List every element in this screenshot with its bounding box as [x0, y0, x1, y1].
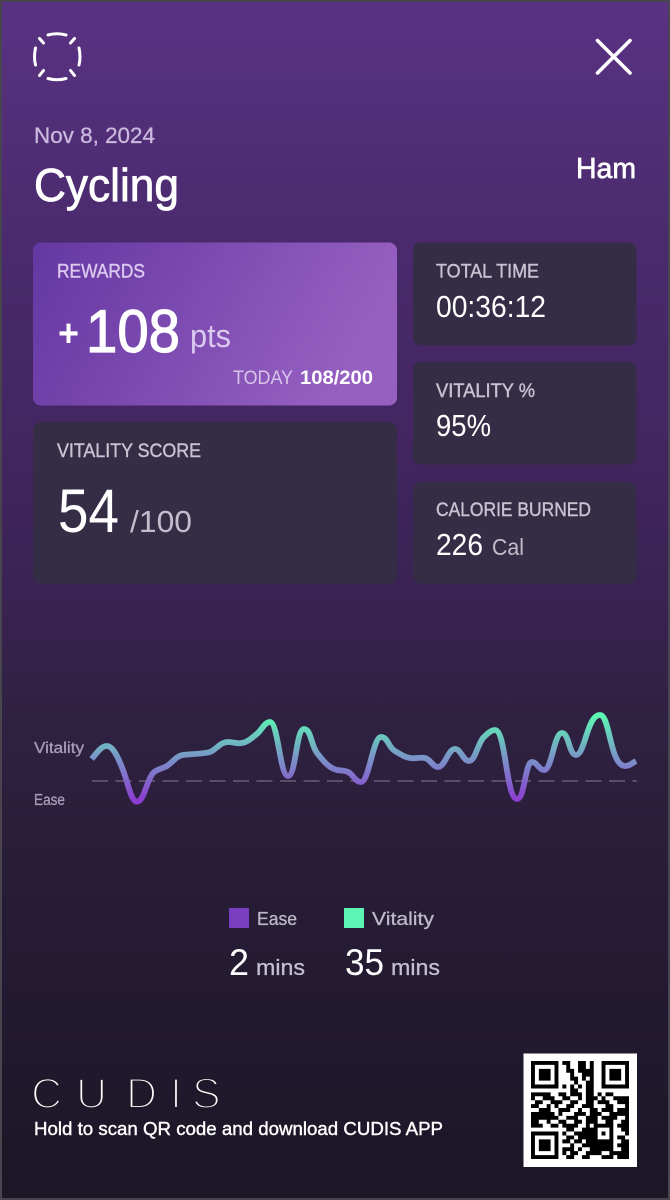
panel: rewards: 108/200 [300, 368, 373, 389]
vitality score label: VITALITY SCORE [57, 441, 201, 462]
ease unit: mins [256, 955, 305, 980]
rewards value: + [58, 313, 79, 355]
vitality percent label: VITALITY % [436, 381, 535, 402]
legend: ease [229, 908, 305, 983]
vitality swatch [344, 908, 364, 928]
calorie label: CALORIE BURNED [436, 500, 591, 521]
vitality value: 35 [345, 942, 384, 983]
icon: close [598, 40, 630, 73]
ease label: Ease [257, 909, 297, 929]
panel: total time [413, 242, 636, 346]
ease value: 2 [229, 942, 249, 983]
total time label: TOTAL TIME [436, 262, 539, 282]
vitality curve [92, 715, 636, 802]
rewards unit: pts [190, 318, 231, 354]
vitality score value: 54 [58, 477, 119, 545]
panel: rewards [33, 242, 397, 406]
title: Cycling [34, 159, 179, 211]
icon: dashed circle [34, 34, 80, 80]
vitality percent value: 95% [436, 408, 491, 443]
legend: vitality [344, 908, 440, 983]
total time value: 00:36:12 [436, 289, 546, 324]
vitality unit: mins [391, 955, 440, 980]
panel: rewards: 108 [86, 298, 180, 365]
calorie value: 226 [436, 527, 483, 562]
panel: calorie burned [413, 482, 636, 584]
user name: Ham [576, 153, 636, 185]
footer text: Hold to scan QR code and download CUDIS APP [34, 1119, 443, 1139]
panel: vitality percent [413, 362, 636, 464]
threshold line [92, 780, 637, 782]
today progress: TODAY [233, 368, 293, 389]
axis label: ease: Ease [34, 792, 65, 809]
axis label: vitality: Vitality [34, 740, 84, 757]
vitality label: Vitality [372, 909, 434, 929]
vitality score max: /100 [130, 504, 192, 539]
QR code [524, 1054, 637, 1167]
panel: vitality score [33, 422, 397, 584]
ease swatch [229, 908, 249, 928]
line chart [34, 715, 637, 809]
brand logo: CUDIS [31, 1070, 221, 1118]
rewards label: REWARDS [57, 262, 145, 282]
calorie unit: Cal [492, 534, 524, 560]
date: Nov 8, 2024 [34, 123, 155, 148]
